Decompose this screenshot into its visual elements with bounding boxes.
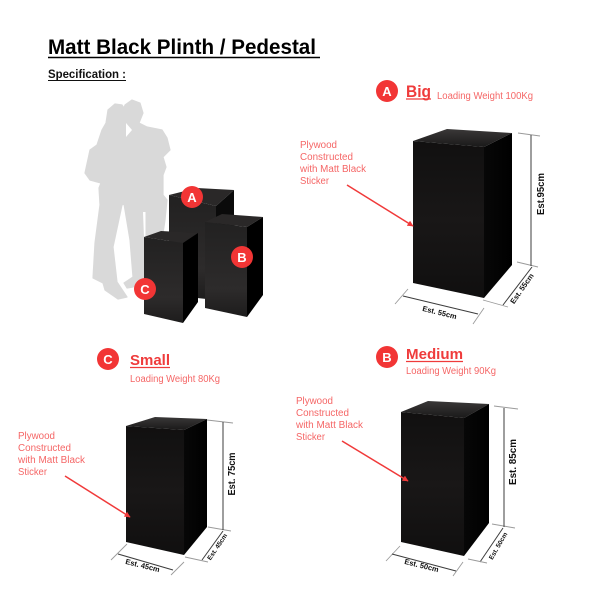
dimension: depth 55cm (483, 267, 536, 307)
heading: Medium: Medium (406, 346, 463, 363)
dimension: height 95cm (517, 133, 547, 267)
material note: Constructed (18, 443, 71, 454)
loading weight: Loading Weight 90Kg (406, 366, 496, 377)
loading weight: Loading Weight 100Kg (437, 91, 533, 102)
dimension: height 75cm (207, 420, 238, 531)
dimension: width 45cm: Est. 45cm (125, 557, 161, 574)
heading: Big: Big (406, 82, 431, 101)
badge A (376, 80, 398, 102)
plinth C (126, 417, 207, 555)
dimension: depth 45cm (185, 531, 229, 562)
dimension: depth 50cm: Est. 50cm (488, 531, 509, 561)
panel: B medium (295, 346, 519, 576)
plinth C small view (144, 231, 198, 323)
material note (299, 140, 367, 187)
dimension: height 85cm: Est. 85cm (507, 439, 519, 485)
dimension: height 75cm: Est. 75cm (226, 452, 238, 496)
dimension: width 55cm (395, 289, 484, 324)
badge C: C (103, 352, 113, 367)
dimension: height 85cm (492, 406, 519, 528)
dimension: width 50cm (386, 546, 463, 576)
badge B (376, 346, 398, 368)
panel: A big (299, 80, 547, 324)
heading: Small: Small (130, 352, 170, 369)
badge B: B (237, 250, 247, 265)
dimension: height 95cm: Est.95cm (535, 173, 547, 215)
material note: Plywood (296, 396, 333, 407)
badge A (181, 186, 203, 208)
badge A: A (187, 190, 197, 205)
arrow (347, 185, 413, 226)
material note: Plywood (18, 431, 55, 442)
loading weight: Loading Weight 80Kg (130, 374, 220, 385)
material note: Constructed (296, 408, 349, 419)
arrow (342, 441, 408, 481)
subheading: specification: Specification : (48, 69, 126, 81)
plinth A small view (169, 188, 234, 300)
dimension: width 55cm: Est. 55cm (422, 304, 458, 321)
dimension: width 45cm (111, 544, 184, 575)
material note: Constructed (300, 152, 353, 163)
panel: C small (17, 348, 238, 575)
badge B (231, 246, 253, 268)
panel: size comparison with couple silhouette (85, 100, 263, 323)
title: Matt Black Plinth / Pedestal (48, 36, 316, 59)
material note: Sticker (300, 176, 330, 187)
badge B: B (382, 350, 392, 365)
dimension: width 50cm: Est. 50cm (404, 557, 440, 574)
material note (295, 396, 364, 443)
material note: Plywood (300, 140, 337, 151)
material note: Sticker (296, 432, 326, 443)
plinth B (401, 401, 489, 556)
icon: couple silhouette (85, 100, 170, 299)
badge C: C (140, 282, 150, 297)
material note (17, 431, 86, 478)
dimension: depth 55cm: Est. 55cm (508, 271, 536, 305)
badge C (134, 278, 156, 300)
material note: with Matt Black (295, 420, 364, 431)
badge A: A (382, 84, 392, 99)
material note: with Matt Black (17, 455, 86, 466)
dimension: depth 50cm (468, 528, 509, 563)
badge C (97, 348, 119, 370)
material note: with Matt Black (299, 164, 367, 175)
plinth B small view (205, 214, 263, 317)
arrow (65, 476, 130, 517)
plinth A (413, 129, 512, 298)
dimension: depth 45cm: Est. 45cm (206, 532, 229, 562)
material note: Sticker (18, 467, 48, 478)
